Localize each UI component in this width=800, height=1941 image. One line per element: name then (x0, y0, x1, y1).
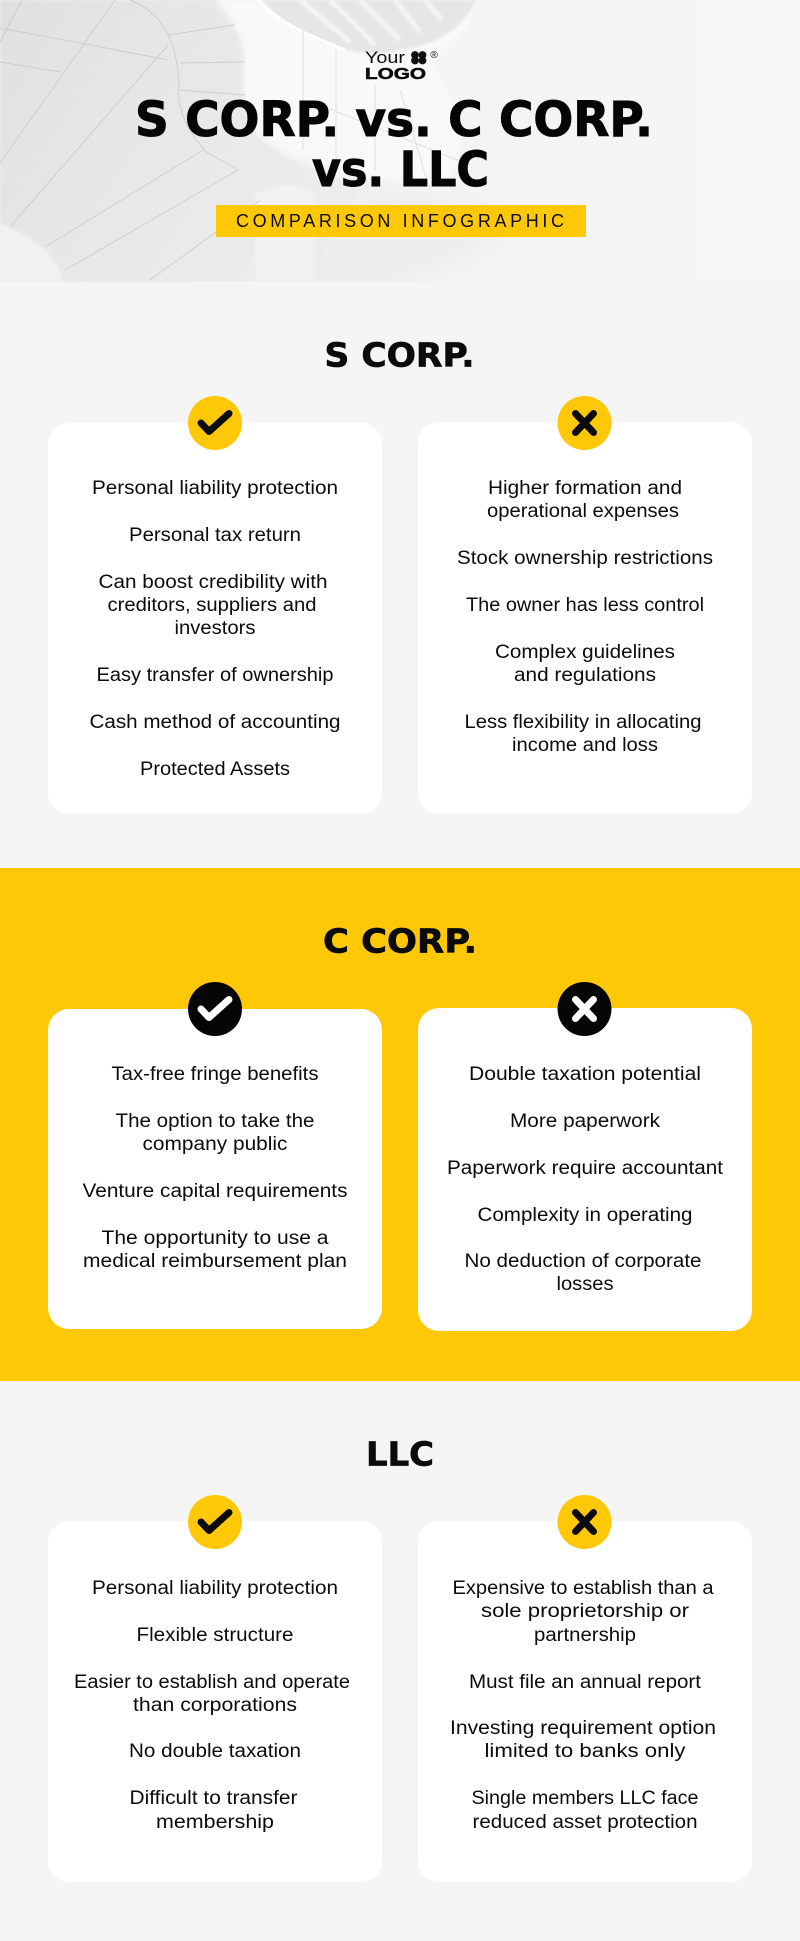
list: LLC disadvantages: reduced asset protection (472, 1812, 698, 1833)
list: S Corp advantages: Can boost credibility with (98, 572, 328, 593)
list: C Corp disadvantages: losses (556, 1274, 614, 1295)
panel: C Corp disadvantages (418, 982, 752, 1331)
list: C Corp disadvantages: Double taxation potential (469, 1064, 701, 1085)
header background photo: white architecture (0, 0, 474, 282)
list: C Corp advantages: The option to take the (116, 1111, 314, 1132)
list: LLC disadvantages: sole proprietorship or (481, 1601, 690, 1622)
list: LLC advantages: No double taxation (129, 1741, 301, 1762)
panel: S Corp disadvantages (418, 396, 752, 814)
heading: LLC: LLC (366, 1434, 434, 1474)
list: C Corp disadvantages: Complexity in operating (478, 1205, 692, 1226)
list: S Corp advantages: Protected Assets (140, 759, 290, 780)
icon: cross (558, 1495, 612, 1549)
list: S Corp advantages: Personal liability protection (92, 478, 338, 499)
list: S Corp advantages: Cash method of accounting (90, 712, 340, 733)
panel: C Corp advantages (48, 982, 382, 1329)
list: LLC disadvantages: Investing requirement option (450, 1718, 716, 1739)
panel: S Corp advantages (48, 396, 382, 814)
icon: check (188, 1495, 242, 1549)
header banner (0, 0, 649, 282)
list: C Corp disadvantages (447, 1064, 724, 1295)
list: S Corp disadvantages: Complex guidelines (495, 642, 675, 663)
panel: LLC advantages (48, 1495, 382, 1882)
list: S Corp disadvantages: Stock ownership restrictions (457, 548, 713, 569)
list: C Corp advantages: Venture capital requirements (82, 1181, 348, 1202)
list: C Corp disadvantages: Paperwork require accountant (447, 1158, 724, 1179)
list: S Corp advantages (90, 478, 340, 780)
list: LLC advantages: Difficult to transfer (130, 1788, 298, 1809)
list: C Corp advantages (82, 1064, 348, 1272)
icon: cross (558, 396, 612, 450)
logo: ® (430, 50, 438, 61)
icon: logo clover (411, 51, 426, 64)
list: LLC disadvantages: Must file an annual report (469, 1672, 702, 1693)
list: S Corp advantages: Easy transfer of ownership (96, 665, 334, 686)
subtitle ribbon: COMPARISON INFOGRAPHIC (236, 211, 564, 231)
list: C Corp disadvantages: More paperwork (510, 1111, 661, 1132)
list: LLC disadvantages (450, 1578, 716, 1833)
logo: LOGO (365, 66, 426, 83)
icon: check (188, 982, 242, 1036)
list: S Corp advantages: creditors, suppliers and (108, 595, 316, 616)
logo (365, 48, 438, 83)
heading: C Corp: C CORP. (323, 922, 477, 960)
list: S Corp advantages: investors (174, 618, 256, 639)
list: S Corp disadvantages: income and loss (512, 735, 658, 756)
title (135, 92, 653, 198)
icon: check (188, 396, 242, 450)
subtitle ribbon (216, 205, 586, 237)
list: S Corp disadvantages: operational expenses (487, 501, 679, 522)
panel: LLC disadvantages (418, 1495, 752, 1882)
list: S Corp disadvantages: Higher formation and (488, 478, 682, 499)
list: LLC advantages: membership (156, 1812, 274, 1833)
list: C Corp advantages: The opportunity to use a (102, 1228, 329, 1249)
list: C Corp advantages: company public (142, 1134, 288, 1155)
list: LLC disadvantages: limited to banks only (484, 1741, 686, 1762)
list: LLC disadvantages: partnership (534, 1625, 636, 1646)
list: C Corp disadvantages: No deduction of corporate (464, 1251, 702, 1272)
logo: Your (365, 48, 405, 67)
list: C Corp advantages: medical reimbursement plan (83, 1251, 347, 1272)
list: C Corp advantages: Tax-free fringe benefits (112, 1064, 318, 1085)
icon: cross (558, 982, 612, 1036)
title: vs. LLC (312, 142, 489, 198)
list: LLC advantages: Flexible structure (136, 1625, 294, 1646)
list: S Corp disadvantages (457, 478, 713, 756)
heading: S Corp: S CORP. (324, 336, 474, 374)
list: S Corp disadvantages: and regulations (514, 665, 656, 686)
list: LLC advantages: than corporations (133, 1695, 297, 1716)
list: LLC advantages (74, 1578, 350, 1833)
list: LLC advantages: Personal liability protection (92, 1578, 338, 1599)
section: S Corp (0, 282, 800, 868)
list: S Corp advantages: Personal tax return (129, 525, 301, 546)
title: S CORP. vs. C CORP. (135, 92, 653, 148)
section: C Corp (0, 868, 800, 1381)
list: S Corp disadvantages: Less flexibility in allocating (464, 712, 702, 733)
list: LLC advantages: Easier to establish and operate (74, 1672, 350, 1693)
list: S Corp disadvantages: The owner has less control (466, 595, 704, 616)
list: LLC disadvantages: Single members LLC face (472, 1788, 698, 1809)
list: LLC disadvantages: Expensive to establish than a (452, 1578, 714, 1599)
section: LLC (0, 1381, 800, 1941)
